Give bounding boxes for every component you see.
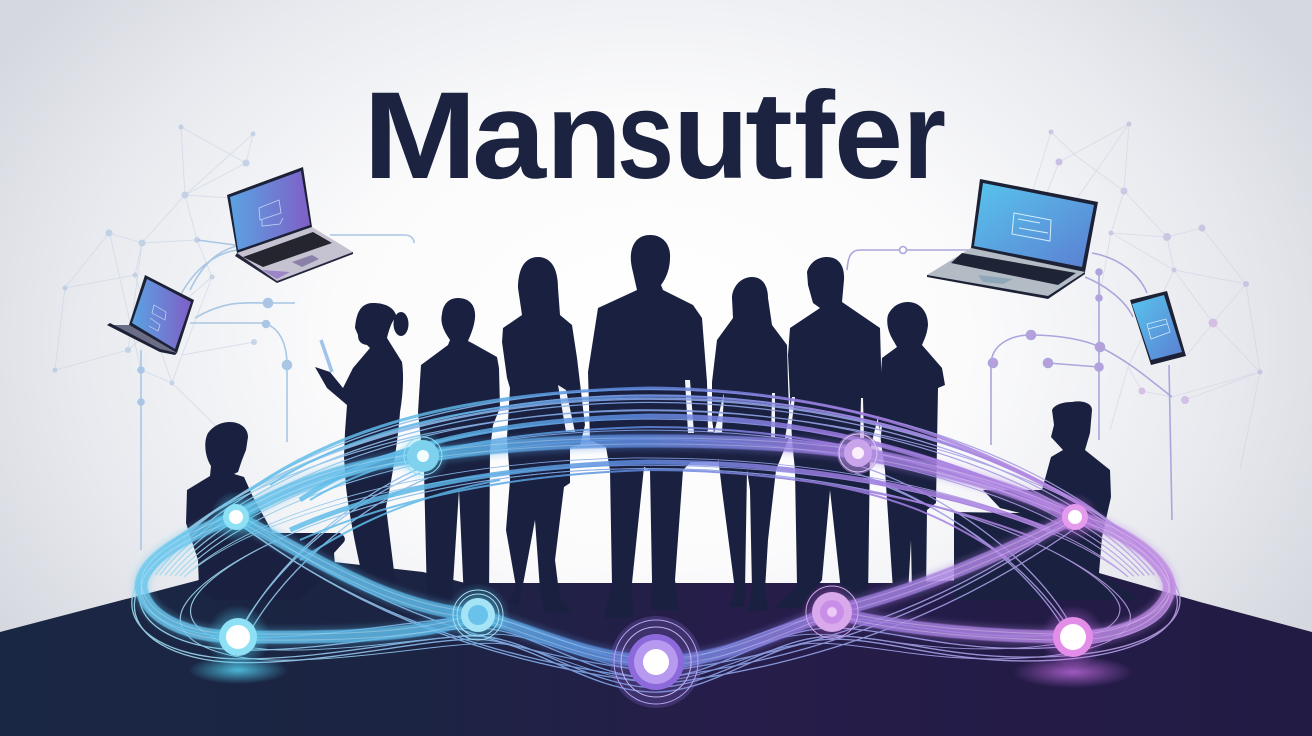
icon: laptop upper right [927, 179, 1098, 299]
title: r [903, 67, 946, 205]
node: upper right [1051, 493, 1099, 541]
icon: tablet right [1130, 291, 1186, 365]
person: man second from left [418, 298, 500, 600]
title: f [794, 67, 836, 205]
person: long hair woman centre left [502, 257, 585, 612]
node: top right [837, 432, 879, 474]
person: ponytail with tablet [315, 303, 408, 590]
node: inner lower left [446, 583, 510, 647]
person: tall man centre [588, 235, 708, 618]
node: lower right [1041, 605, 1105, 669]
glow under right node [1013, 656, 1133, 688]
icon: laptop upper left [227, 167, 353, 283]
node: lower left [206, 605, 270, 669]
title: t [745, 67, 793, 205]
glow under left node [188, 656, 288, 684]
title: s [617, 67, 674, 205]
node: upper left [210, 491, 262, 543]
left network mesh [52, 124, 260, 430]
title: M [363, 67, 477, 205]
ribbon highlight strands [141, 438, 1169, 665]
node: inner lower right [802, 582, 862, 642]
people group [186, 235, 1140, 618]
person: seated left with laptop [186, 422, 345, 600]
node: centre [610, 616, 702, 708]
floor [0, 562, 1312, 736]
node: top left [397, 430, 449, 482]
person: man with short hair right [774, 257, 882, 608]
gaps between figures [558, 380, 882, 445]
dark overlap between centre figures [688, 432, 718, 462]
person: short hair rightmost [878, 302, 945, 595]
title: u [673, 67, 749, 205]
network rings [132, 388, 1180, 692]
main ribbon glow [141, 441, 1169, 662]
title: a [472, 67, 547, 205]
person: seated right at desk [954, 401, 1140, 600]
right network mesh [1030, 122, 1262, 470]
title: e [834, 67, 903, 205]
right connector lines [847, 246, 1172, 520]
left connector lines [138, 235, 414, 550]
person: long hair woman centre right [712, 277, 790, 612]
icon: laptop lower left [107, 275, 194, 355]
title: n [546, 67, 622, 205]
thin orbit lines [132, 389, 1180, 692]
secondary ribbon bands [250, 388, 1090, 560]
main ribbon [141, 441, 1169, 662]
